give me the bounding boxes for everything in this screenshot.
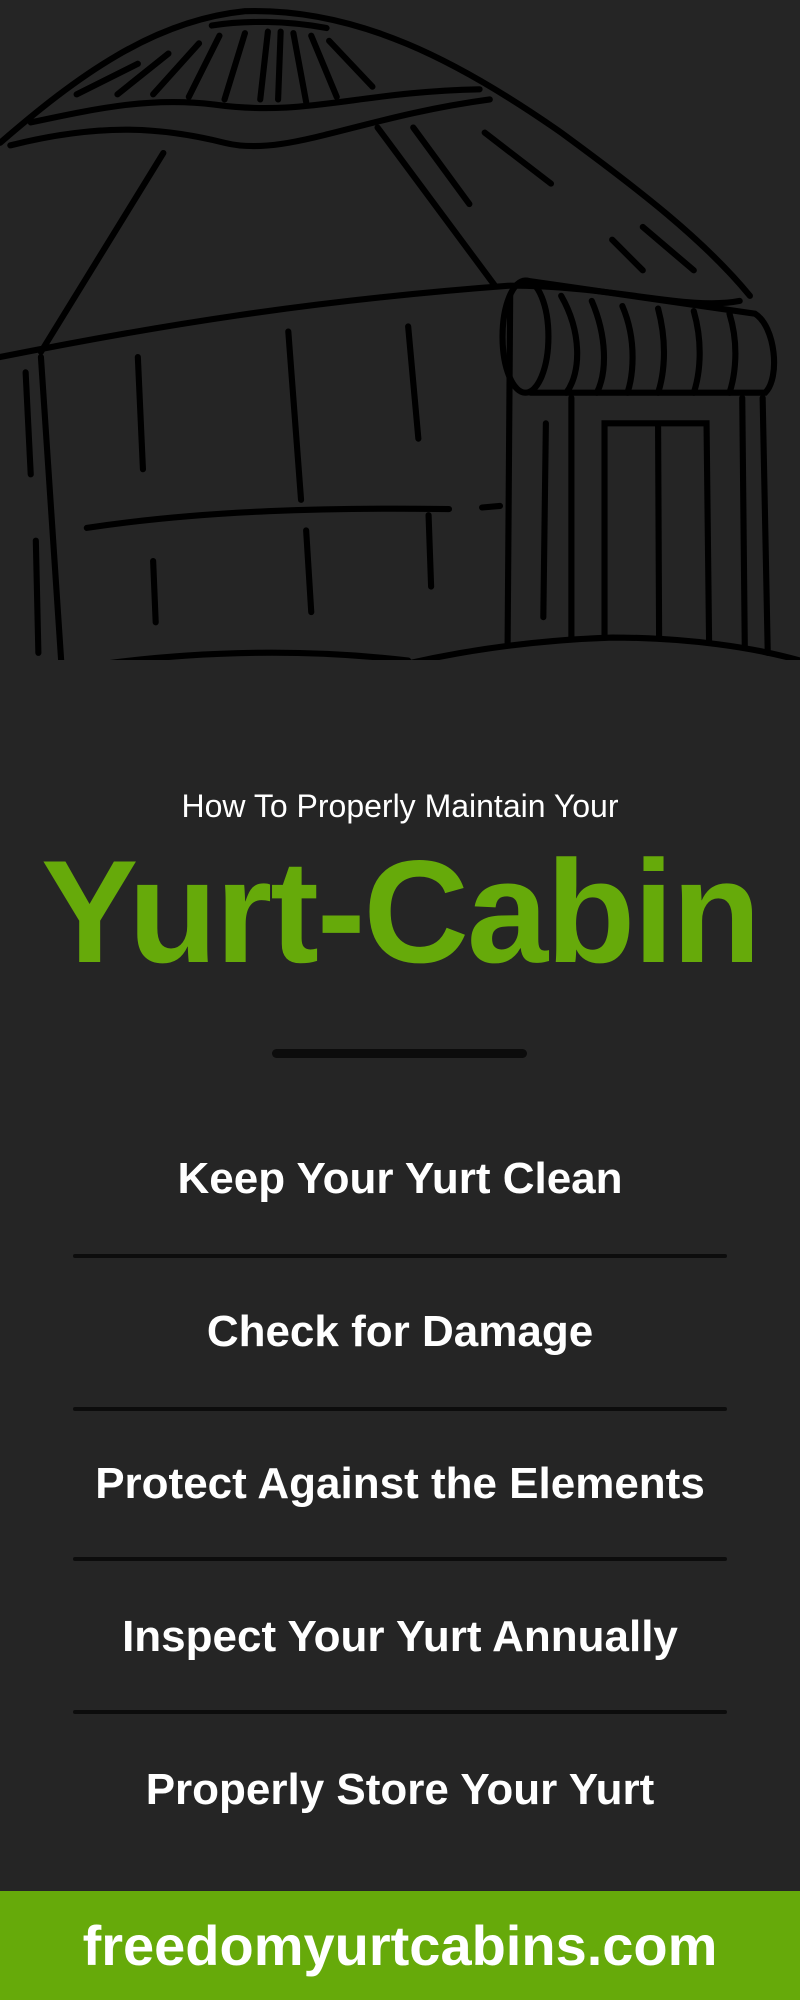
list item 4: Inspect Your Yurt Annually [122,1612,678,1661]
list item 3: Protect Against the Elements [95,1459,705,1508]
list item 1: Keep Your Yurt Clean [177,1154,623,1203]
footer url: freedomyurtcabins.com [83,1914,717,1977]
divider bar [272,1049,527,1058]
footer band [0,1891,800,2000]
title: Yurt-Cabin [41,830,759,993]
illustration: yurt line drawing [0,8,800,660]
list item 2: Check for Damage [207,1307,593,1356]
subtitle: How To Properly Maintain Your [182,788,618,824]
list item 5: Properly Store Your Yurt [146,1765,654,1814]
